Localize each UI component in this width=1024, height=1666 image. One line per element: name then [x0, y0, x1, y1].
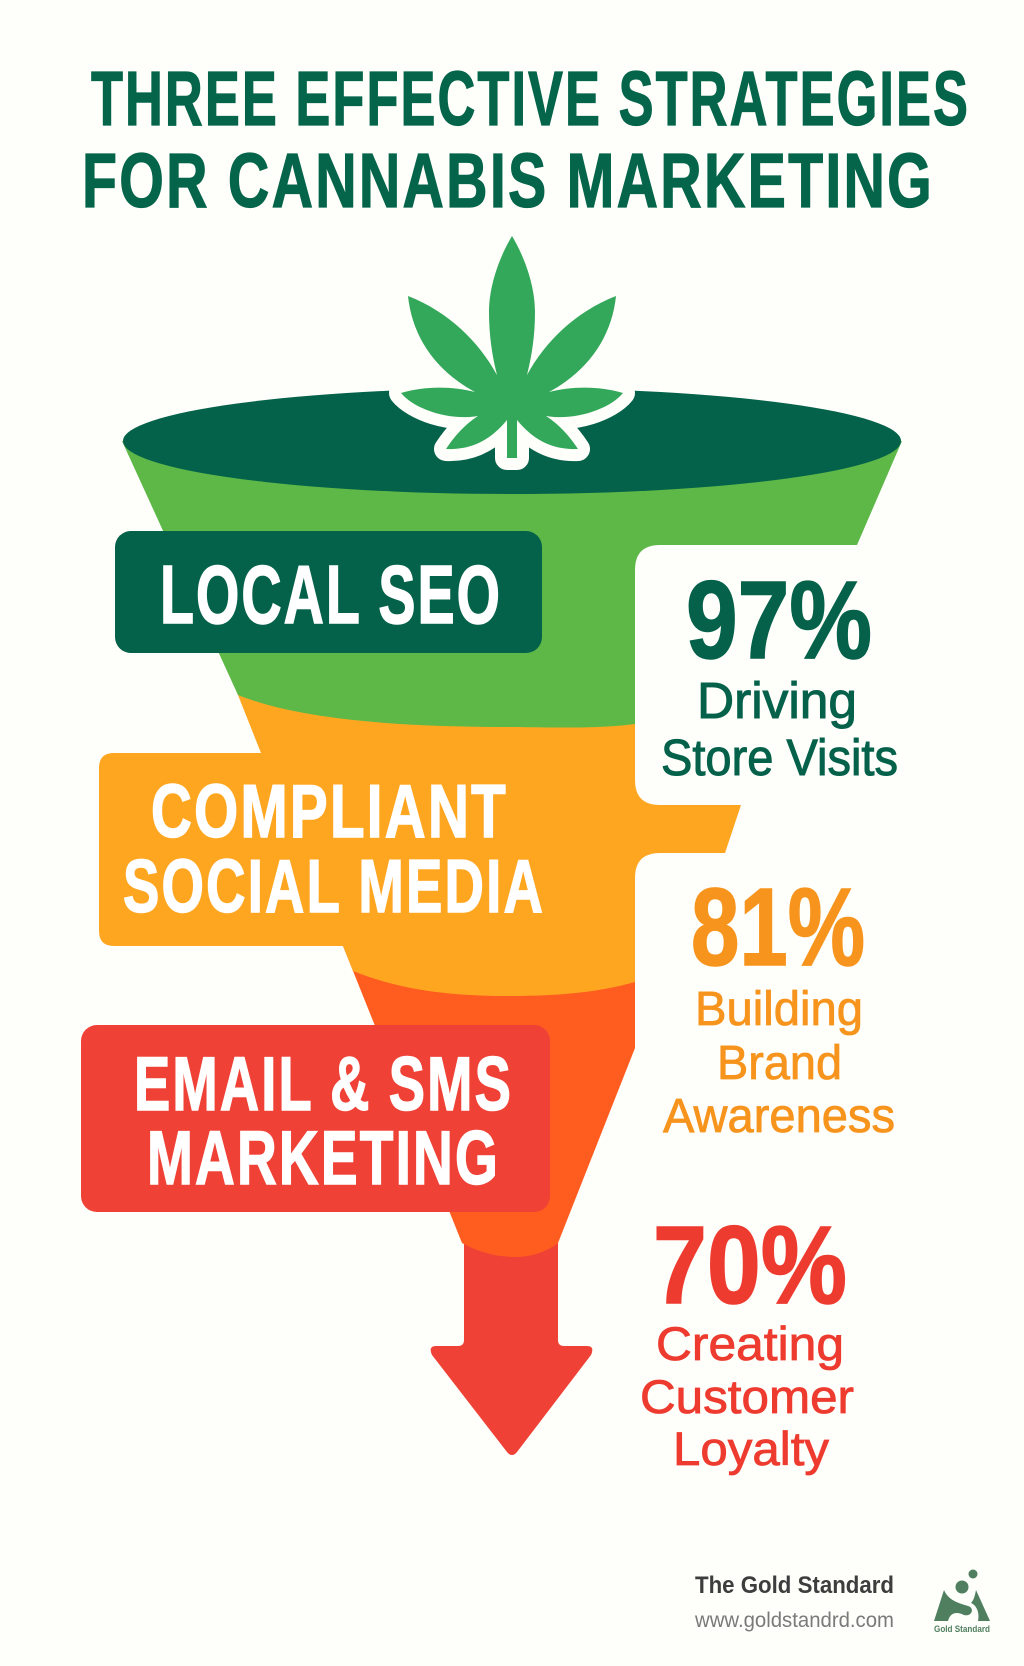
footer: brand name and website: www.goldstandrd.com [694, 1609, 894, 1632]
stat: 97% driving store visits: 97% [686, 559, 872, 682]
funnel segment: orange [99, 680, 741, 996]
panel: Email and SMS Marketing label: MARKETING [147, 1116, 500, 1201]
footer: brand name and website: The Gold Standard [695, 1572, 894, 1599]
title [82, 56, 970, 224]
icon: cannabis leaf [401, 236, 623, 458]
text: Compliant Social Media label: SOCIAL MEDIA [123, 844, 545, 928]
icon: Gold Standard logo: Gold Standard [934, 1624, 990, 1634]
text: Compliant Social Media label: COMPLIANT [151, 769, 508, 853]
stat: 97% driving store visits: Driving [697, 672, 857, 729]
panel: Local SEO label: LOCAL SEO [160, 548, 502, 641]
stat: 81% building brand awareness: Brand [717, 1037, 842, 1090]
funnel [99, 388, 902, 1455]
stat: 70% creating customer loyalty: Customer [640, 1370, 854, 1423]
panel: Local SEO label [115, 531, 542, 653]
stat: 97% driving store visits: Store Visits [661, 729, 898, 786]
stat: 81% building brand awareness [663, 866, 895, 1143]
icon: Gold Standard logo [934, 1570, 990, 1634]
funnel segment: red-orange [343, 946, 635, 1257]
stat: 70% creating customer loyalty: 70% [653, 1204, 847, 1327]
panel: Email and SMS Marketing label [81, 1025, 550, 1212]
footer: brand name and website [694, 1572, 894, 1632]
stat: 70% creating customer loyalty: Loyalty [673, 1422, 830, 1475]
stat: 81% building brand awareness: 81% [691, 866, 865, 989]
stat: 70% creating customer loyalty: Creating [656, 1317, 844, 1370]
funnel opening ellipse [123, 388, 901, 494]
text: Compliant Social Media label [123, 769, 545, 928]
funnel segment: green [122, 441, 902, 728]
stat: 70% creating customer loyalty [640, 1204, 854, 1475]
stat: 81% building brand awareness: Building [695, 983, 863, 1036]
arrow: downward red arrow [431, 1225, 592, 1455]
stat: 97% driving store visits [661, 559, 898, 786]
stat: 81% building brand awareness: Awareness [663, 1090, 895, 1143]
panel: Email and SMS Marketing label: EMAIL & SMS [134, 1042, 513, 1127]
